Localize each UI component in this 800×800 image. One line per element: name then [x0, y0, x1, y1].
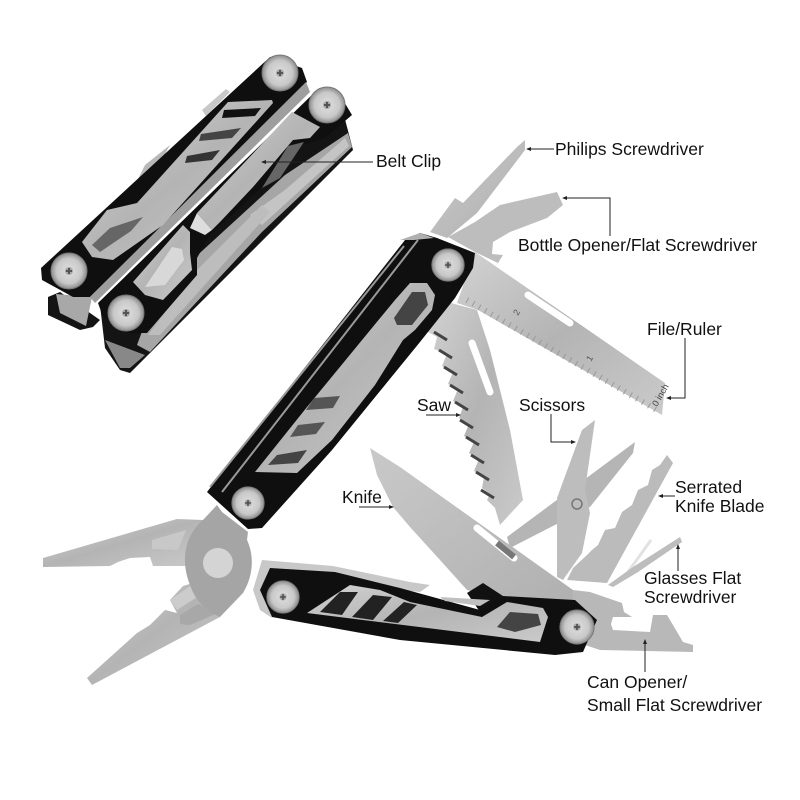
callout: Can Opener / Small Flat Screwdriver: [587, 639, 762, 715]
blade: file and ruler: 0 inch: [650, 382, 671, 408]
pliers: [43, 505, 252, 685]
callout: Serrated Knife Blade: Serrated: [675, 477, 742, 497]
closed tool: rear frame: [48, 89, 353, 373]
open tool: screws: [232, 249, 594, 644]
blade: file and ruler: 2: [511, 308, 522, 317]
callout: Serrated Knife Blade: Knife Blade: [675, 496, 765, 516]
callout: Knife: [342, 487, 394, 509]
callout: Scissors: [519, 395, 585, 444]
blade: knife: [370, 448, 575, 602]
callout: Philips Screwdriver: Philips Screwdriver: [555, 139, 704, 159]
blade: bottle opener: [448, 192, 563, 263]
blade: serrated knife: [567, 455, 673, 583]
callout: Glasses Flat Screwdriver: [644, 544, 741, 607]
callout: Knife: Knife: [342, 487, 382, 507]
blade: scissors: [507, 420, 635, 580]
blade: file and ruler: [457, 252, 671, 415]
closed tool: front handle: [41, 57, 310, 303]
closed multitool: [41, 55, 353, 373]
callout: Can Opener / Small Flat Screwdriver: Can Opener/: [587, 672, 687, 692]
upper handle: [207, 233, 475, 529]
closed tool: belt clip handle: [98, 90, 352, 333]
lower handle: [253, 560, 597, 655]
callout: Belt Clip: Belt Clip: [376, 151, 441, 171]
callout: File/Ruler: [647, 319, 722, 400]
callout: Saw: Saw: [417, 395, 451, 415]
callout: Bottle Opener/Flat Screwdriver: Bottle Opener/Flat Screwdriver: [518, 235, 757, 255]
blade: philips screwdriver: [430, 140, 525, 238]
blade: file and ruler: 1: [584, 354, 595, 363]
blade: can opener: [570, 590, 693, 652]
callout: Glasses Flat Screwdriver: Screwdriver: [644, 587, 737, 607]
callout: Scissors: Scissors: [519, 395, 585, 415]
callout: Bottle Opener/Flat Screwdriver: [518, 196, 757, 255]
callout: Glasses Flat Screwdriver: Glasses Flat: [644, 568, 741, 588]
closed tool: screws: [51, 55, 345, 331]
callout: Can Opener / Small Flat Screwdriver: Small Flat Screwdriver: [587, 695, 762, 715]
callout: Serrated Knife Blade: [658, 477, 765, 516]
blade: saw: [428, 300, 523, 525]
open multitool: [43, 140, 693, 685]
callout: File/Ruler: File/Ruler: [647, 319, 722, 339]
callout: Belt Clip: [261, 151, 441, 171]
blade: glasses flat screwdriver: [608, 537, 682, 587]
